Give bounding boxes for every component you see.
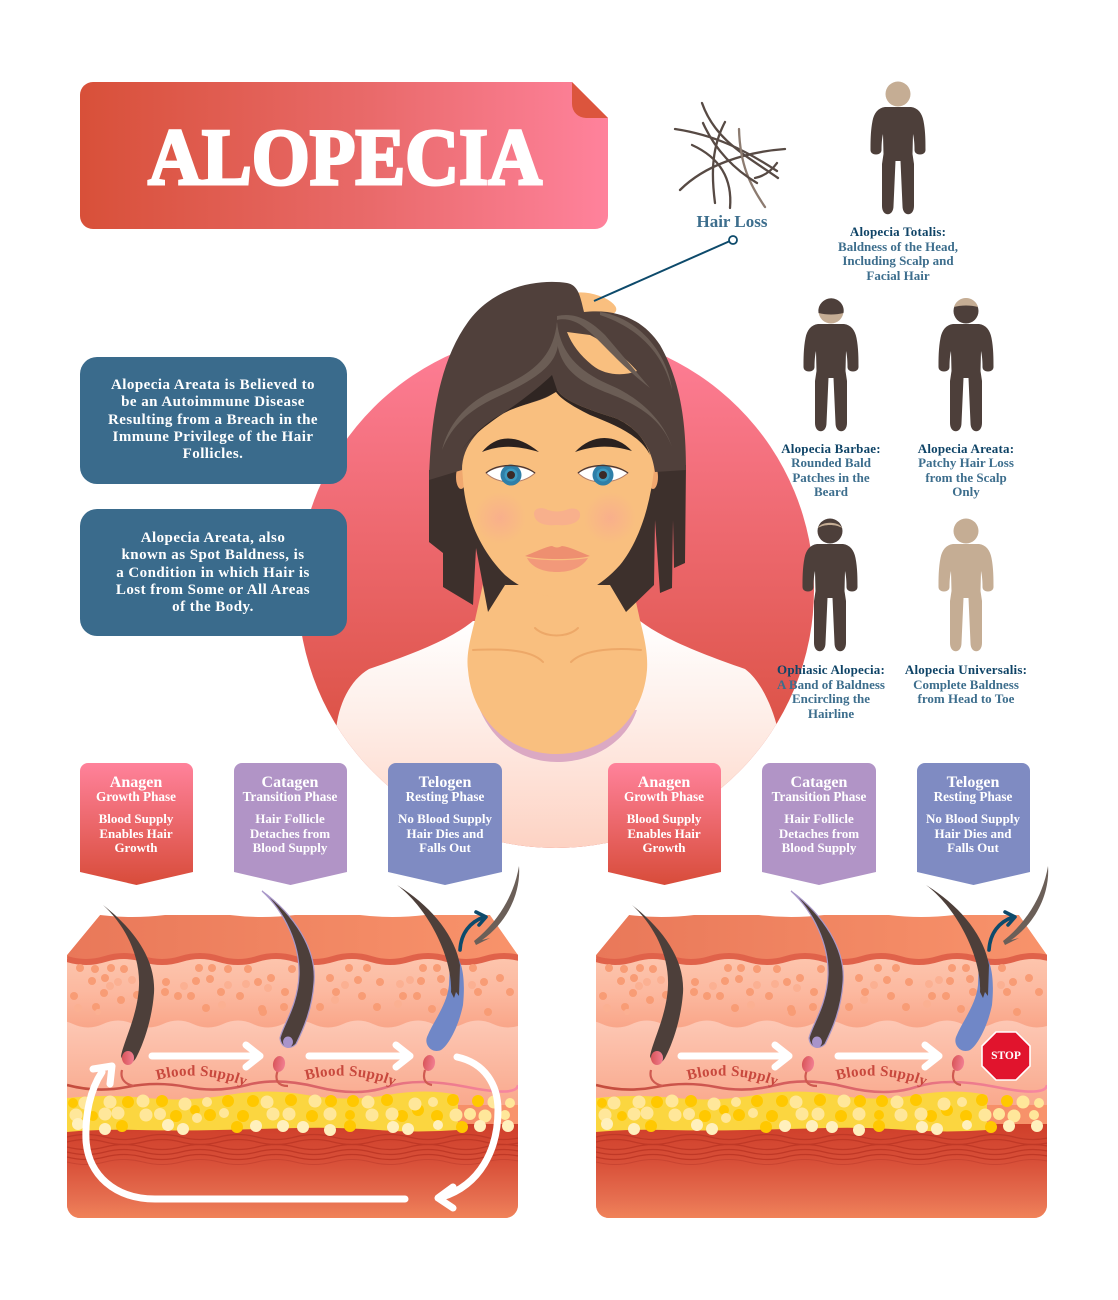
cycle arrow (86, 1057, 498, 1208)
eyebrows (482, 438, 632, 452)
label: universalis: Complete Baldness (913, 677, 1019, 692)
info box: autoimmune: Immune Privilege of the Hair (113, 429, 313, 445)
figure: alopecia universalis (938, 518, 994, 651)
label: totalis: Alopecia Totalis: (850, 224, 946, 239)
label: ophiasic (777, 662, 885, 721)
figure: alopecia areata (938, 298, 994, 431)
info box: spot baldness: of the Body. (172, 599, 254, 615)
figure: alopecia barbae (804, 298, 858, 431)
tab: telogen left (388, 763, 502, 885)
neck creases (473, 628, 641, 662)
front hair (429, 282, 686, 480)
tab: telogen left: Falls Out (419, 840, 471, 855)
tab: telogen left: Telogen (419, 774, 471, 791)
tab: catagen left: Detaches from (250, 826, 330, 841)
tab: anagen left: Anagen (110, 774, 162, 791)
tab: catagen left (234, 763, 347, 885)
skin diagram: right: Blood Supply (835, 1065, 927, 1088)
label: totalis: Including Scalp and (842, 253, 954, 268)
tab: anagen right (608, 763, 721, 885)
label: ophiasic: Hairline (808, 706, 854, 721)
nose (534, 508, 580, 525)
tab: catagen left: Hair Follicle (255, 811, 325, 826)
stop sign (982, 1032, 1030, 1080)
label: ophiasic: A Band of Baldness (777, 677, 885, 692)
info box: autoimmune: Alopecia Areata is Believed to (111, 377, 315, 393)
right eye (578, 464, 628, 486)
tab: catagen right (762, 763, 876, 885)
tab: telogen right (917, 763, 1030, 885)
tab: telogen right: Telogen (947, 774, 999, 791)
ears (456, 465, 658, 489)
label: totalis: Facial Hair (866, 268, 930, 283)
info box: spot baldness: known as Spot Baldness, is (121, 547, 305, 563)
tab: catagen left: Catagen (262, 774, 319, 791)
neck (467, 575, 647, 754)
tab: catagen left: Transition Phase (243, 789, 337, 804)
back hair (429, 465, 686, 612)
collar (480, 710, 637, 762)
tab: anagen left: Blood Supply (99, 811, 174, 826)
info box: spot baldness: Lost from Some or All Areas (116, 582, 310, 598)
tab: telogen right: No Blood Supply (926, 811, 1020, 826)
lips (525, 546, 590, 572)
tab: catagen right: Blood Supply (782, 840, 857, 855)
hair loss icon (675, 103, 785, 208)
info box: autoimmune: Resulting from a Breach in the (108, 412, 318, 428)
label: areata: Alopecia Areata: (918, 441, 1014, 456)
tab: anagen left (80, 763, 193, 885)
tab: catagen left: Blood Supply (253, 840, 328, 855)
skin diagram: right: Blood Supply (686, 1065, 778, 1088)
tab: anagen left: Enables Hair (99, 826, 173, 841)
label: ophiasic: Ophiasic Alopecia: (777, 662, 885, 677)
tab: catagen right: Catagen (791, 774, 848, 791)
stop sign: STOP (991, 1050, 1021, 1062)
tab: telogen left: No Blood Supply (398, 811, 492, 826)
label: totalis: Baldness of the Head, (838, 239, 958, 254)
tab: telogen left: Hair Dies and (406, 826, 484, 841)
title banner: ALOPECIA (148, 114, 542, 202)
label: ophiasic: Encircling the (792, 691, 870, 706)
label: barbae: Beard (814, 484, 849, 499)
label: totalis (838, 224, 958, 283)
background circle (298, 332, 814, 848)
skin diagram: right (596, 866, 1048, 1218)
tab: anagen right: Blood Supply (627, 811, 702, 826)
tab: anagen right: Enables Hair (627, 826, 701, 841)
label: universalis: Alopecia Universalis: (905, 662, 1027, 677)
tab: telogen left: Resting Phase (406, 789, 485, 804)
tab: anagen left: Growth (114, 840, 158, 855)
label: barbae (781, 441, 881, 499)
bald patch (567, 332, 637, 374)
tab: catagen right: Detaches from (779, 826, 859, 841)
left eye (486, 464, 535, 486)
info box: spot baldness: Alopecia Areata, also (141, 530, 285, 546)
figure: alopecia totalis (870, 82, 926, 214)
skin diagram: left (67, 866, 520, 1218)
hairline shadow (462, 375, 650, 455)
tab: telogen right: Falls Out (947, 840, 999, 855)
tab: catagen right: Transition Phase (772, 789, 866, 804)
label: universalis: from Head to Toe (918, 691, 1015, 706)
woman portrait (336, 282, 778, 860)
face (460, 380, 654, 597)
tab: catagen right: Hair Follicle (784, 811, 854, 826)
info box: spot baldness (80, 509, 347, 636)
tab: telogen right: Hair Dies and (934, 826, 1012, 841)
tab: anagen right: Anagen (638, 774, 690, 791)
tab: anagen right: Growth Phase (624, 789, 704, 804)
label: areata: from the Scalp (925, 470, 1007, 485)
info box: autoimmune (80, 357, 347, 484)
skin diagram: left: Blood Supply (304, 1065, 396, 1088)
label: areata (918, 441, 1014, 499)
bald crown (565, 288, 619, 320)
info box: autoimmune: be an Autoimmune Disease (121, 394, 305, 410)
label: barbae: Patches in the (792, 470, 870, 485)
label: barbae: Alopecia Barbae: (781, 441, 881, 456)
blush (474, 492, 636, 544)
label: areata: Only (952, 484, 980, 499)
shirt (336, 621, 778, 860)
title banner (80, 82, 608, 229)
label: areata: Patchy Hair Loss (918, 455, 1014, 470)
info box: spot baldness: a Condition in which Hair is (116, 565, 310, 581)
skin diagram: left: Blood Supply (155, 1065, 247, 1088)
tab: anagen left: Growth Phase (96, 789, 176, 804)
info box: autoimmune: Follicles. (183, 446, 243, 462)
pointer line (594, 236, 737, 301)
tab: anagen right: Growth (642, 840, 686, 855)
hair loss label: Hair Loss (696, 212, 768, 231)
label: universalis (905, 662, 1027, 706)
hair highlights (442, 312, 672, 450)
tab: telogen right: Resting Phase (934, 789, 1013, 804)
figure: ophiasic alopecia (802, 518, 858, 651)
label: barbae: Rounded Bald (791, 455, 872, 470)
